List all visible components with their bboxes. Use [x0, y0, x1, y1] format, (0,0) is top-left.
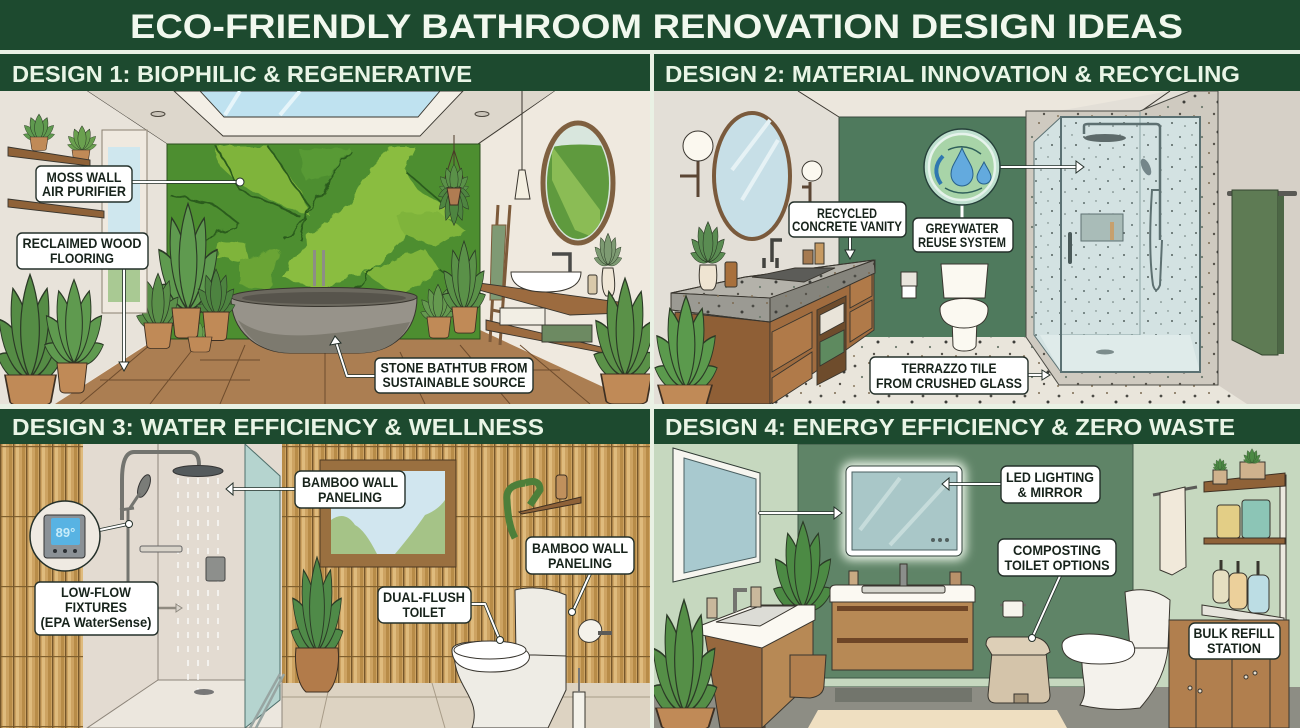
dual-flush toilet — [452, 588, 566, 728]
label: low-flow fixtures: LOW-FLOW — [61, 584, 132, 600]
label: recycled concrete vanity: RECYCLED — [817, 205, 877, 221]
composting toilet — [986, 637, 1050, 703]
panel: design 3 water efficiency and wellness — [0, 409, 650, 728]
heading: design 3: DESIGN 3: WATER EFFICIENCY & WELLNESS — [12, 414, 544, 440]
floor plant — [288, 557, 346, 692]
green accent wall — [798, 444, 1133, 678]
concrete vanity — [671, 260, 875, 404]
wood floor — [55, 330, 640, 404]
label: bamboo wall paneling, lower — [526, 537, 634, 616]
label: reclaimed wood flooring: FLOORING — [50, 250, 114, 266]
label: dual-flush toilet — [378, 587, 504, 644]
heading: design 1 — [0, 54, 650, 91]
tile floor — [282, 683, 650, 728]
toilet paper — [901, 272, 917, 298]
panel: design 1 biophilic and regenerative — [0, 54, 659, 405]
foreground plant — [648, 600, 720, 728]
label: low-flow fixtures — [35, 582, 182, 635]
stone bathtub — [231, 250, 417, 353]
label: bulk refill station: STATION — [1207, 640, 1261, 656]
callout: low-flow thermostat: 89° — [56, 525, 75, 540]
greywater reuse icon and label: GREYWATER — [926, 220, 998, 236]
ceiling spotlights — [151, 112, 489, 116]
greywater reuse icon and label — [913, 129, 1084, 252]
left vanity — [702, 587, 826, 728]
shower enclosure — [83, 444, 284, 728]
scene: energy-efficient bathroom — [648, 444, 1300, 728]
toilet — [940, 264, 988, 351]
moss wall — [167, 144, 480, 339]
label: bulk refill station — [1189, 623, 1280, 659]
ladder rack — [490, 205, 510, 345]
potted plants by the wall — [134, 204, 488, 352]
LED mirror — [842, 462, 966, 560]
panel: design 4 energy efficiency and zero waste — [648, 409, 1300, 728]
wall shelf and trailing plant — [507, 475, 581, 538]
vessel sink and faucet — [511, 233, 623, 296]
label: stone bathtub: SUSTAINABLE SOURCE — [382, 374, 526, 390]
background plant — [771, 522, 835, 617]
green accent wall — [839, 117, 1026, 339]
label: dual-flush toilet: TOILET — [402, 604, 446, 620]
label: moss wall air purifier — [36, 166, 244, 202]
label: LED lighting and mirror — [942, 466, 1100, 503]
round mirror — [540, 123, 620, 250]
pendant light — [515, 91, 530, 199]
scene: recycled materials bathroom — [652, 91, 1300, 406]
title: ECO-FRIENDLY BATHROOM RENOVATION DESIGN IDEAS — [130, 8, 1183, 46]
label: recycled concrete vanity — [789, 202, 906, 259]
heading: design 2 — [654, 54, 1300, 91]
arrow: side mirror to LED mirror — [760, 507, 842, 519]
label: terrazzo tile — [870, 357, 1050, 394]
label: composting toilet options — [998, 539, 1116, 642]
icon: water recycling — [924, 129, 1000, 205]
heading: design 3 — [0, 409, 650, 444]
label: bamboo wall paneling, upper: PANELING — [318, 489, 382, 505]
greywater reuse icon and label: REUSE SYSTEM — [918, 234, 1006, 250]
shelves with plants — [8, 114, 147, 313]
toilet brush — [573, 668, 585, 728]
window with hills — [320, 460, 456, 567]
label: composting toilet options: TOILET OPTIONS — [1004, 557, 1110, 573]
label: LED lighting and mirror: LED LIGHTING — [1006, 469, 1094, 485]
towel and bar — [1153, 487, 1197, 575]
hanging plant — [437, 135, 471, 225]
label: low-flow fixtures: FIXTURES — [65, 599, 127, 615]
label: stone bathtub: STONE BATHTUB FROM — [380, 360, 528, 376]
scene: water-saving bathroom — [0, 444, 650, 728]
label: LED lighting and mirror: & MIRROR — [1018, 484, 1082, 500]
terrazzo floor — [770, 337, 1247, 404]
toilet paper — [1000, 601, 1026, 617]
heading: design 4: DESIGN 4: ENERGY EFFICIENCY & ZERO WASTE — [665, 414, 1235, 440]
panel: design 2 material innovation and recycling — [652, 54, 1300, 406]
scene: biophilic bathroom — [0, 91, 659, 405]
label: stone bathtub — [330, 336, 533, 393]
heading: design 2: DESIGN 2: MATERIAL INNOVATION & RECYCLING — [665, 61, 1240, 87]
toilet — [1062, 590, 1170, 709]
label: moss wall air purifier: AIR PURIFIER — [42, 183, 126, 199]
label: bamboo wall paneling, lower: PANELING — [548, 555, 612, 571]
wood vanity shelves — [479, 283, 626, 355]
shower with terrazzo surround — [1026, 91, 1218, 385]
central vanity — [830, 564, 975, 670]
label: recycled concrete vanity: CONCRETE VANITY — [792, 218, 903, 234]
toilet paper — [578, 619, 612, 643]
callout: low-flow thermostat — [30, 501, 132, 571]
label: dual-flush toilet: DUAL-FLUSH — [383, 589, 465, 605]
label: reclaimed wood flooring: RECLAIMED WOOD — [22, 235, 142, 251]
heading: design 4 — [654, 409, 1300, 444]
title banner — [0, 0, 1300, 50]
towel and bar — [1227, 190, 1297, 355]
label: bamboo wall paneling, upper: BAMBOO WALL — [302, 474, 398, 490]
skylight — [174, 91, 463, 136]
label: low-flow fixtures: (EPA WaterSense) — [40, 614, 152, 630]
wood cabinet — [1169, 620, 1289, 728]
mirror and sconces — [680, 113, 822, 239]
label: terrazzo tile: FROM CRUSHED GLASS — [876, 375, 1022, 391]
foreground plants — [0, 274, 659, 405]
label: composting toilet options: COMPOSTING — [1013, 542, 1101, 558]
bath rug — [808, 710, 1067, 728]
bulk refill shelves — [1202, 449, 1286, 630]
label: bamboo wall paneling, upper — [226, 471, 405, 508]
sink accessories — [689, 222, 824, 290]
label: moss wall air purifier: MOSS WALL — [46, 169, 122, 185]
label: bamboo wall paneling, lower: BAMBOO WALL — [532, 540, 628, 556]
label: reclaimed wood flooring — [17, 233, 148, 371]
heading: design 1: DESIGN 1: BIOPHILIC & REGENERATIVE — [12, 61, 472, 87]
label: terrazzo tile: TERRAZZO TILE — [902, 360, 996, 376]
foreground plant — [652, 296, 720, 406]
label: bulk refill station: BULK REFILL — [1194, 625, 1275, 641]
side mirror — [673, 448, 760, 582]
floor — [654, 687, 1300, 728]
